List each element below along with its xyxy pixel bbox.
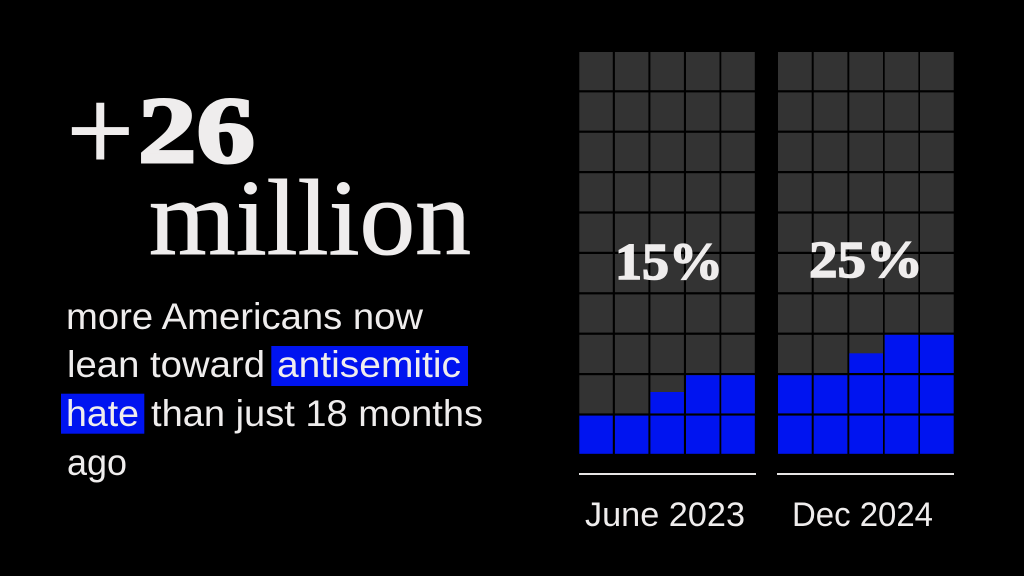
label: Dec 2024: Dec 2024 [792,496,933,534]
value: 15%: 15% [615,234,723,291]
chart: June 2023 waffle grid [579,52,755,454]
text block: description: than just 18 months [151,393,483,434]
text block: description: hate [66,393,139,434]
text block: description: antisemitic [277,344,461,385]
text block: description: more Americans now [66,296,423,337]
highlight: hate [61,394,144,434]
filled cells: 25 percent [778,335,954,454]
highlight: antisemitic [271,346,468,386]
label: June 2023: June 2023 [585,496,745,534]
title: +26 million: million [149,159,471,278]
title: +26 million: + [67,65,134,196]
text block: description: ago [67,442,127,483]
grid cells [778,52,954,373]
text block: description: lean toward [67,344,265,385]
value: 25%: 25% [809,232,923,289]
text block: description [61,296,483,483]
axis line: June 2023 [579,473,756,475]
grid cells [579,52,755,413]
chart: Dec 2024 waffle grid [778,52,954,454]
title: +26 million [67,65,471,278]
axis line: Dec 2024 [777,473,954,475]
filled cells: 15 percent [579,375,755,454]
title: +26 million: 26 [138,79,255,183]
